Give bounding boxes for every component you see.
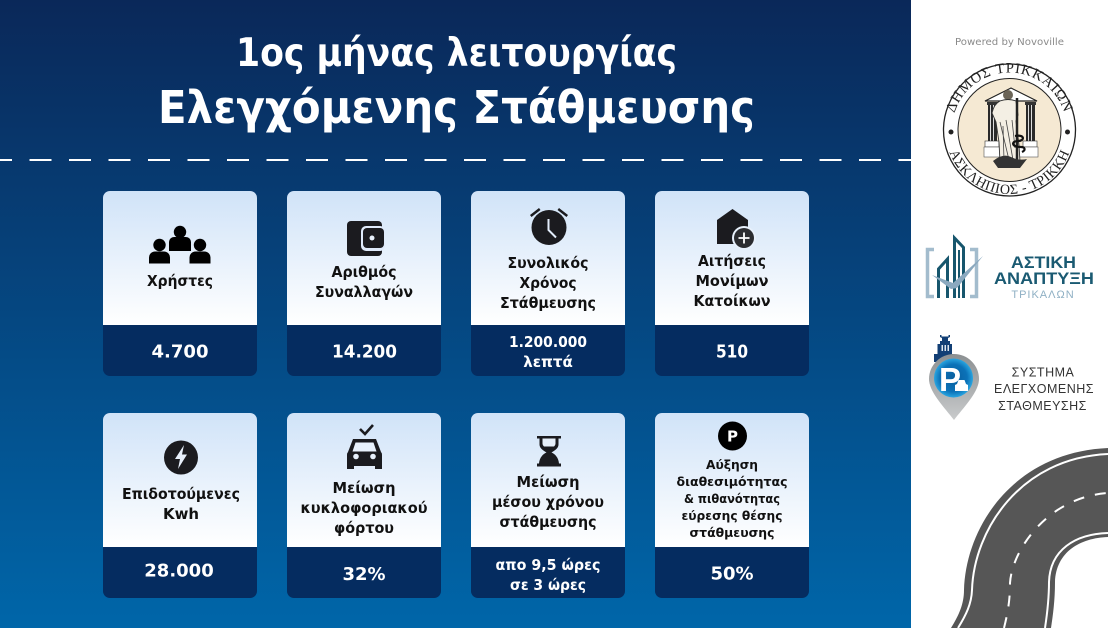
label: & πιθανότητας: [684, 491, 780, 506]
wordmark: ΑΝΑΠΤΥΞΗ: [994, 269, 1094, 288]
label: εύρεσης θέσης: [682, 508, 782, 523]
icon: car with check: [347, 425, 382, 469]
value: 28.000: [144, 560, 214, 582]
wordmark: ΑΣΤΙΚΗ: [1011, 253, 1076, 272]
wordmark: [994, 366, 1094, 413]
panel: transactions: [287, 191, 441, 376]
value: 14.200: [332, 342, 397, 362]
value: σε 3 ώρες: [510, 576, 586, 594]
title: 1ος μήνας λειτουργίας: [236, 31, 677, 76]
panel: parking time reduction: [471, 413, 625, 598]
panel: traffic reduction: [287, 413, 441, 598]
title: Ελεγχόμενης Στάθμευσης: [158, 81, 755, 134]
icon: parking circle: [718, 422, 747, 450]
panel: availability increase: [655, 413, 809, 598]
logo: municipality seal: [942, 63, 1076, 197]
panel: subsidized kwh: [103, 413, 257, 598]
wordmark: ΤΡΙΚΑΛΩΝ: [1011, 289, 1075, 301]
icon: parking pin with tower: [929, 335, 979, 420]
label: Μείωση: [516, 473, 580, 491]
label: Kwh: [163, 505, 199, 523]
label: Κατοίκων: [694, 292, 770, 310]
icon: house plus: [717, 209, 756, 250]
value: 4.700: [152, 342, 208, 362]
label: [500, 254, 596, 312]
road graphic: [951, 448, 1108, 628]
logo: controlled parking system: [929, 335, 1094, 420]
panel: total parking time: [471, 191, 625, 376]
value: 32%: [342, 564, 386, 585]
icon: alarm clock: [530, 208, 568, 245]
logo: municipality seal: ΔΗΜΟΣ ΤΡΙΚΚΑΙΩΝ: [946, 63, 1073, 113]
label: διαθεσιμότητας: [676, 474, 788, 489]
label: Χρόνος: [520, 274, 576, 292]
value: λεπτά: [523, 353, 573, 371]
label: στάθμευσης: [500, 513, 596, 531]
icon: parking circle: P: [727, 428, 738, 446]
label: [122, 485, 240, 523]
icon: buildings with check: [928, 238, 983, 298]
label: φόρτου: [334, 519, 394, 537]
label: στάθμευσης: [690, 525, 774, 540]
value: 1.200.000: [509, 333, 587, 351]
label: Συναλλαγών: [315, 283, 413, 301]
icon: users: [149, 226, 211, 264]
label: Αύξηση: [706, 457, 758, 472]
panel: users: [103, 191, 257, 376]
label: [315, 263, 413, 301]
logo: urban development: [928, 238, 1094, 301]
label: [492, 473, 604, 531]
icon: hourglass: [537, 436, 561, 466]
value: απο 9,5 ώρες: [496, 556, 600, 574]
label: Επιδοτούμενες: [122, 485, 240, 503]
wordmark: ΣΤΑΘΜΕΥΣΗΣ: [998, 399, 1087, 413]
label: Συνολικός: [508, 254, 588, 272]
statue: [1003, 90, 1013, 100]
label: Αιτήσεις: [698, 252, 766, 270]
panel: resident applications: [655, 191, 809, 376]
powered by: Powered by Novoville: [955, 37, 1064, 48]
wordmark: [994, 253, 1094, 301]
label: [694, 252, 770, 310]
label: Αριθμός: [332, 263, 396, 281]
wordmark: ΣΥΣΤΗΜΑ: [1012, 366, 1075, 380]
value: [496, 556, 600, 594]
label: [300, 479, 428, 537]
label: κυκλοφοριακού: [300, 499, 428, 517]
label: Χρήστες: [147, 272, 213, 290]
temple: [985, 88, 1037, 101]
value: [509, 333, 587, 371]
icon: parking pin with tower: P: [939, 361, 961, 398]
label: [676, 457, 788, 540]
wordmark: ΕΛΕΓΧΟΜΕΝΗΣ: [994, 382, 1094, 396]
logo: municipality seal: ΑΣΚΛΗΠΙΟΣ - ΤΡΙΚΚΗ: [949, 149, 1070, 194]
label: Μονίμων: [696, 272, 768, 290]
icon: wallet: [347, 221, 385, 256]
label: μέσου χρόνου: [492, 493, 604, 511]
title: [158, 31, 755, 134]
icon: lightning bolt: [164, 440, 198, 474]
label: Μείωση: [332, 479, 396, 497]
value: 50%: [710, 564, 754, 584]
value: 510: [716, 342, 748, 362]
label: Στάθμευσης: [500, 294, 596, 312]
